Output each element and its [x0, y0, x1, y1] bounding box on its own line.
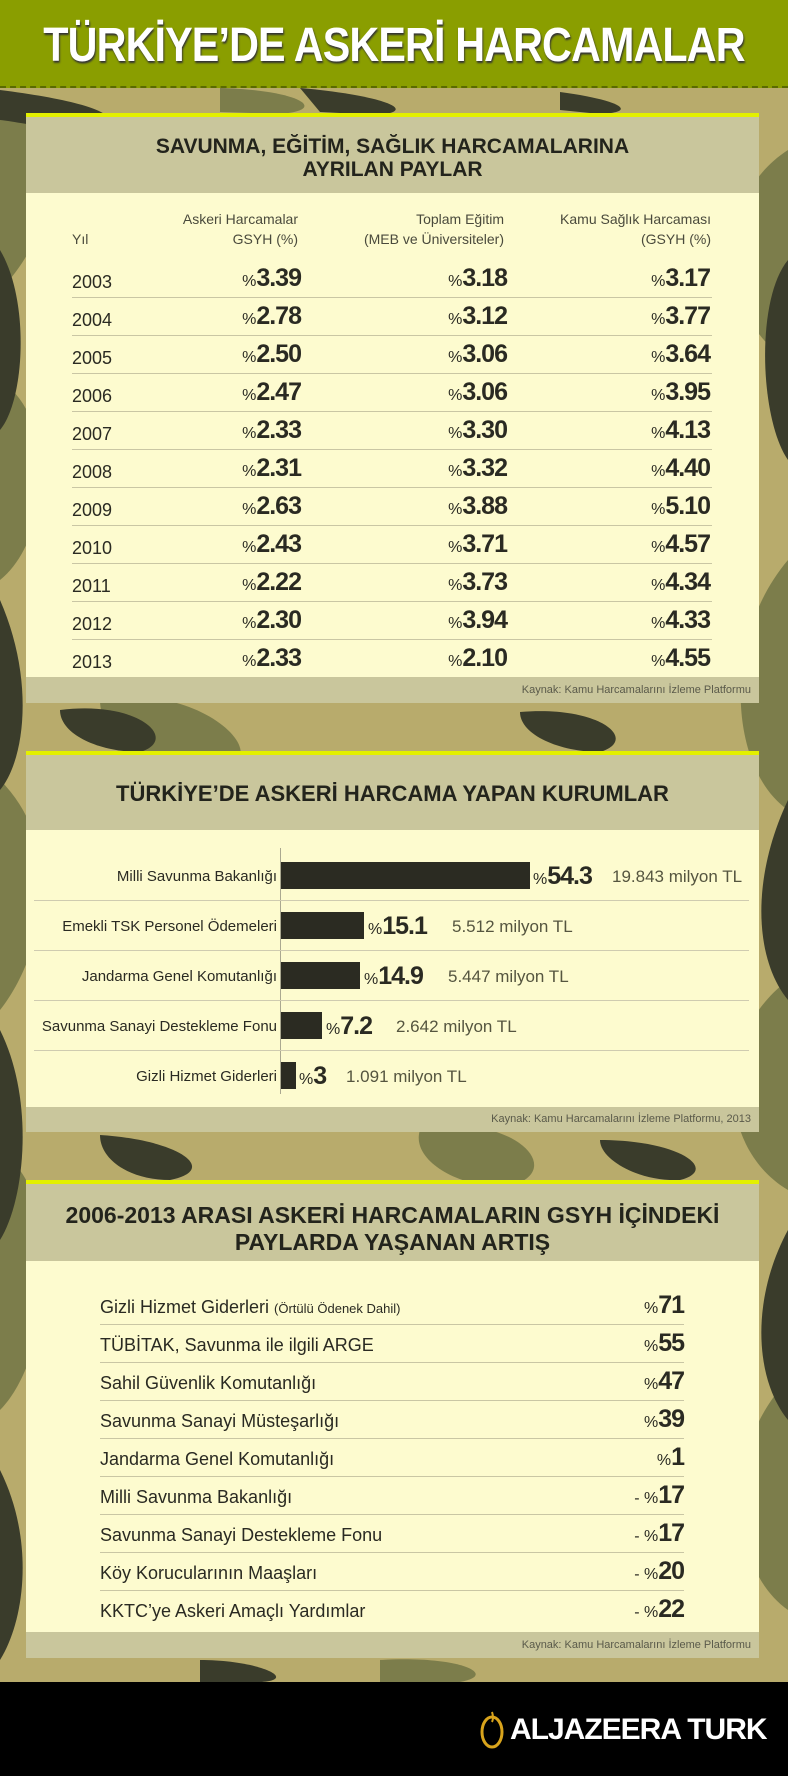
data table: %2.22: [242, 568, 301, 596]
bar chart: [34, 848, 749, 1094]
bar 1: Milli Savunma Bakanlığı: [117, 868, 277, 885]
source: [26, 677, 759, 703]
bar 1: 19.843 milyon TL: [612, 867, 742, 886]
bar 2: [62, 912, 573, 940]
logo text: ALJAZEERA TURK: [510, 1713, 767, 1746]
bar 5: 1.091 milyon TL: [346, 1067, 467, 1086]
bar 4: Savunma Sanayi Destekleme Fonu: [42, 1018, 277, 1035]
data table: %3.71: [448, 530, 507, 558]
bar 4: %7.2: [326, 1012, 372, 1040]
data table: 2003: [72, 272, 112, 292]
source: Kaynak: Kamu Harcamalarını İzleme Platformu, 2013: [491, 1113, 751, 1125]
data table: %2.50: [242, 340, 301, 368]
data table: 2005: [72, 348, 112, 368]
data table: %3.94: [448, 606, 507, 634]
bar 5: [136, 1062, 467, 1090]
bar 3: Jandarma Genel Komutanlığı: [82, 968, 277, 985]
source: [26, 1632, 759, 1658]
data table: %2.10: [448, 644, 507, 672]
change list: Savunma Sanayi Müsteşarlığı: [100, 1411, 339, 1431]
change list: Gizli Hizmet Giderleri (Örtülü Ödenek Dahil): [100, 1297, 400, 1317]
change list: - %20: [634, 1557, 684, 1585]
data table: %3.39: [242, 264, 301, 292]
data table: 2004: [72, 310, 112, 330]
data table: [72, 264, 712, 672]
data table: 2010: [72, 538, 112, 558]
panel: savunma egitim saglik: 2013: [72, 652, 112, 672]
data table: %2.33: [242, 644, 301, 672]
column headers: Yıl: [72, 231, 88, 247]
column headers: [72, 211, 711, 247]
data table: 2007: [72, 424, 112, 444]
change list: Jandarma Genel Komutanlığı: [100, 1449, 334, 1469]
change list: %1: [657, 1443, 684, 1471]
change list: KKTC’ye Askeri Amaçlı Yardımlar: [100, 1601, 365, 1621]
bar 5: Gizli Hizmet Giderleri: [136, 1068, 277, 1085]
bar 2: Emekli TSK Personel Ödemeleri: [62, 918, 277, 935]
bar 5: %3: [299, 1062, 326, 1090]
panel: artis: [26, 1180, 759, 1658]
column headers: GSYH (%): [233, 231, 298, 247]
data table: %2.78: [242, 302, 301, 330]
data table: %4.40: [651, 454, 710, 482]
column headers: Kamu Sağlık Harcaması: [560, 211, 711, 227]
footer: [0, 1682, 788, 1776]
change list: TÜBİTAK, Savunma ile ilgili ARGE: [100, 1335, 374, 1355]
change list: Sahil Güvenlik Komutanlığı: [100, 1373, 316, 1393]
change list: - %17: [634, 1519, 684, 1547]
panel heading: [26, 117, 759, 193]
data table: %3.12: [448, 302, 507, 330]
panel heading: AYRILAN PAYLAR: [302, 158, 483, 181]
data table: %2.47: [242, 378, 301, 406]
data table: %3.30: [448, 416, 507, 444]
change list: %47: [644, 1367, 684, 1395]
bar 2: 5.512 milyon TL: [452, 917, 573, 936]
data table: %3.95: [651, 378, 710, 406]
data table: %3.88: [448, 492, 507, 520]
data table: %3.06: [448, 340, 507, 368]
panel heading: PAYLARDA YAŞANAN ARTIŞ: [235, 1229, 550, 1255]
column headers: Toplam Eğitim: [416, 211, 504, 227]
data table: %2.30: [242, 606, 301, 634]
change list: - %22: [634, 1595, 684, 1623]
data table: 2008: [72, 462, 112, 482]
header bar: [0, 0, 788, 88]
title: TÜRKİYE’DE ASKERİ HARCAMALAR: [43, 19, 745, 72]
change list: %55: [644, 1329, 684, 1357]
bar 1: [117, 862, 742, 890]
source: Kaynak: Kamu Harcamalarını İzleme Platformu: [522, 1639, 751, 1651]
source: [26, 1107, 759, 1132]
logo: [480, 1712, 768, 1748]
column headers: Askeri Harcamalar: [183, 211, 298, 227]
data table: 2006: [72, 386, 112, 406]
data table: %4.34: [651, 568, 710, 596]
data table: %3.32: [448, 454, 507, 482]
bar 3: [82, 962, 569, 990]
column headers: (GSYH (%): [641, 231, 711, 247]
data table: %3.06: [448, 378, 507, 406]
panel heading: TÜRKİYE’DE ASKERİ HARCAMA YAPAN KURUMLAR: [116, 781, 669, 806]
change list: - %17: [634, 1481, 684, 1509]
panel heading: [26, 1184, 759, 1261]
panel heading: [26, 755, 759, 830]
data table: %4.57: [651, 530, 710, 558]
data table: %3.73: [448, 568, 507, 596]
bar 3: %14.9: [364, 962, 423, 990]
data table: %5.10: [651, 492, 710, 520]
icon: aljazeera emblem: [480, 1712, 504, 1748]
data table: 2012: [72, 614, 112, 634]
data table: %3.77: [651, 302, 710, 330]
data table: %4.55: [651, 644, 710, 672]
panel: kurumlar: [26, 751, 759, 1132]
data table: %3.64: [651, 340, 710, 368]
bar 1: %54.3: [533, 862, 592, 890]
change list: %71: [644, 1291, 684, 1319]
data table: %2.33: [242, 416, 301, 444]
change list: Köy Korucularının Maaşları: [100, 1563, 317, 1583]
data table: %3.17: [651, 264, 710, 292]
data table: %2.43: [242, 530, 301, 558]
data table: %4.33: [651, 606, 710, 634]
change list: [100, 1291, 684, 1623]
change list: Milli Savunma Bakanlığı: [100, 1487, 292, 1507]
change list: %39: [644, 1405, 684, 1433]
data table: %4.13: [651, 416, 710, 444]
data table: 2009: [72, 500, 112, 520]
data table: %2.63: [242, 492, 301, 520]
source: Kaynak: Kamu Harcamalarını İzleme Platformu: [522, 684, 751, 696]
bar 2: %15.1: [368, 912, 427, 940]
panel: savunma egitim saglik: [26, 113, 759, 703]
panel heading: 2006-2013 ARASI ASKERİ HARCAMALARIN GSYH İÇİNDEKİ: [66, 1202, 719, 1228]
data table: %2.31: [242, 454, 301, 482]
panel heading: SAVUNMA, EĞİTİM, SAĞLIK HARCAMALARINA: [156, 135, 629, 158]
data table: 2011: [72, 576, 111, 596]
bar 4: [42, 1012, 517, 1040]
data table: %3.18: [448, 264, 507, 292]
bar 4: 2.642 milyon TL: [396, 1017, 517, 1036]
change list: Savunma Sanayi Destekleme Fonu: [100, 1525, 382, 1545]
bar 3: 5.447 milyon TL: [448, 967, 569, 986]
column headers: (MEB ve Üniversiteler): [364, 231, 504, 247]
